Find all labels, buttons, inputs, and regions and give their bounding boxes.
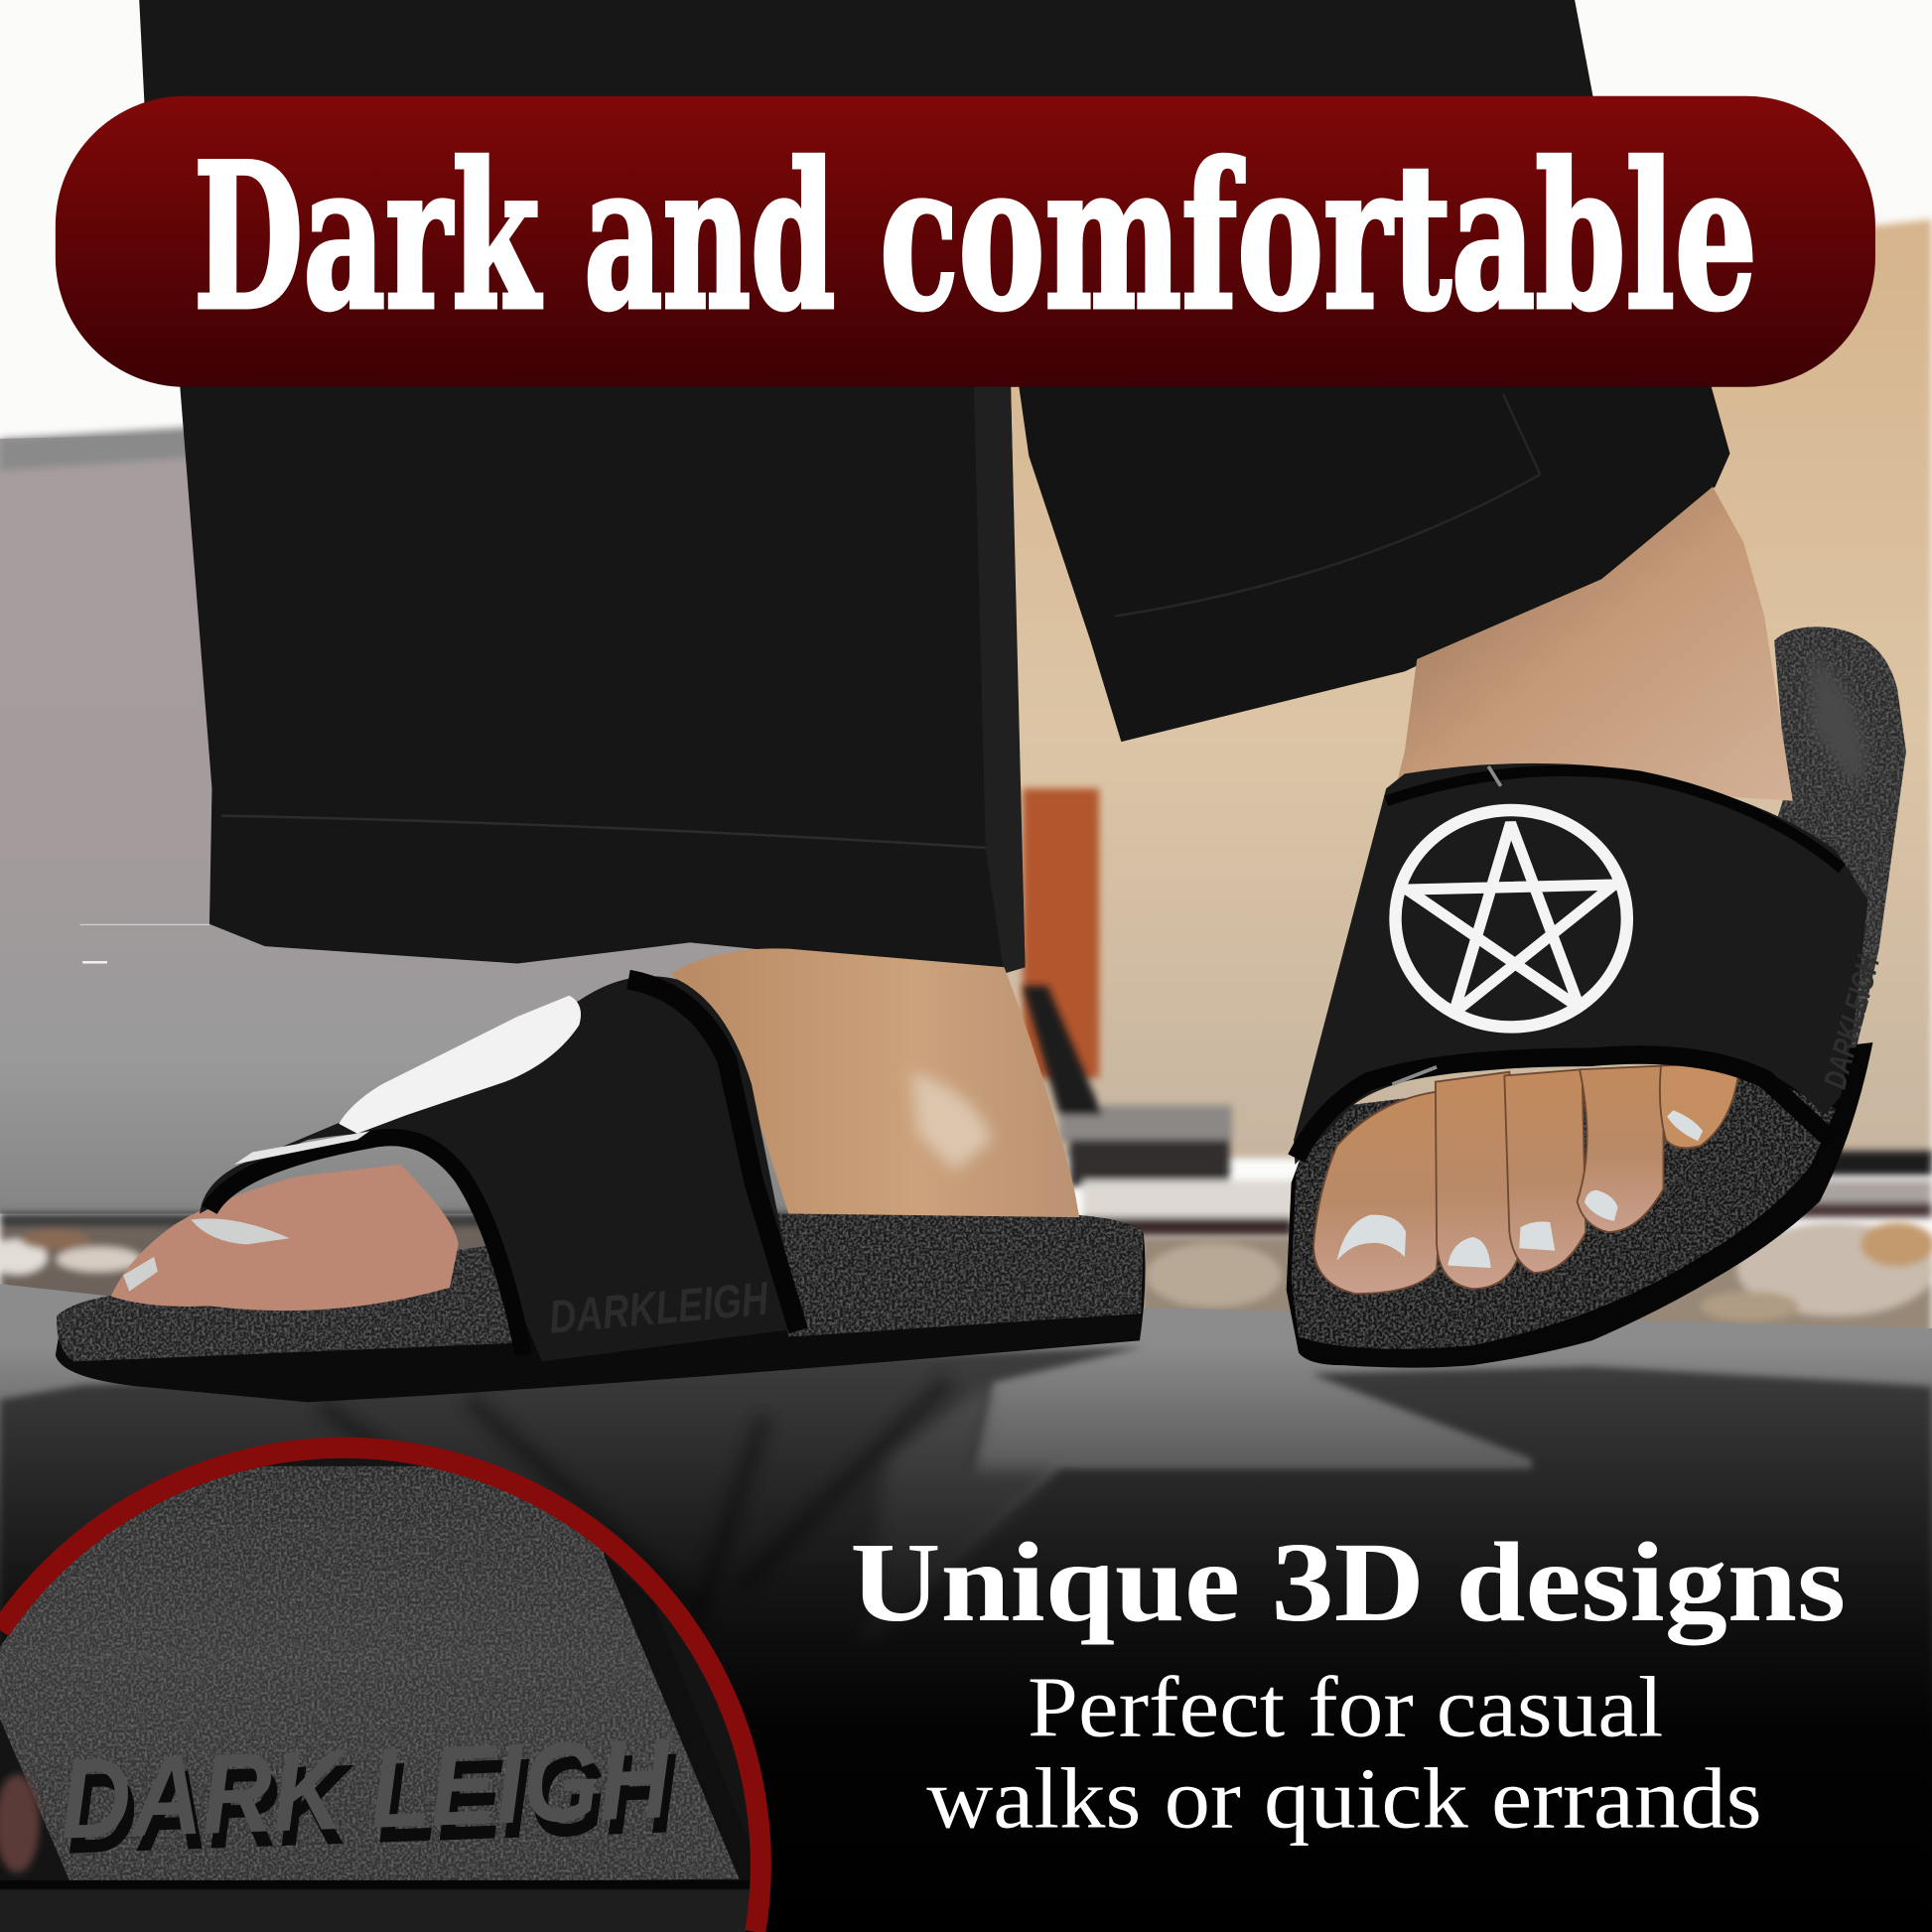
strap: [200, 976, 801, 1361]
body text: Perfect for casual: [1028, 1660, 1663, 1755]
inset detail circle: [0, 1430, 788, 1932]
left trouser leg: [179, 369, 1026, 973]
title: Dark: [194, 120, 542, 354]
right trouser leg: [1017, 369, 1729, 742]
inset logo: [64, 1739, 677, 1854]
grey wall: [0, 419, 888, 1213]
upper trousers: [139, 0, 1598, 123]
right foot and slide: [1287, 486, 1906, 1368]
concrete ground lit: [0, 1284, 1932, 1932]
toes: [1313, 1062, 1739, 1294]
title banner: [56, 96, 1875, 387]
body text: walks or quick errands: [926, 1751, 1762, 1847]
textured footbed side: [57, 1244, 517, 1361]
ground shadows: [0, 1346, 1932, 1932]
back footbed: [1725, 626, 1906, 1146]
orange post: [1023, 788, 1099, 1078]
sole edge: [56, 1232, 1146, 1402]
heading: Unique 3D designs: Unique 3D designs: [850, 1519, 1846, 1645]
body text: [926, 1660, 1762, 1847]
side logo left slide: DARKLEIGH: [547, 1272, 770, 1343]
tan wall: [986, 219, 1932, 1159]
inset lower band: [0, 1890, 788, 1932]
title: [194, 120, 1757, 354]
distant dark ledge: [1023, 986, 1932, 1237]
ankle: [1392, 486, 1793, 801]
front of foot: [111, 1165, 459, 1311]
inset right dark wedge: [604, 1555, 739, 1878]
inset logo: DARK LEIGH: [65, 1730, 680, 1878]
left foot and slide: [56, 948, 1146, 1402]
title: and: [584, 120, 835, 354]
inset strap surface: [0, 1466, 740, 1885]
inset skin hint: [0, 1774, 40, 1872]
trousers: [139, 0, 1729, 973]
textured footbed: [1292, 1059, 1836, 1349]
strap: [1294, 763, 1867, 1165]
heel and ankle: [671, 948, 1079, 1217]
glossy strap rim top: [1386, 770, 1842, 869]
pentagram icon: [1396, 810, 1627, 1027]
bottom dark fade: [0, 1343, 1932, 1932]
toenails: [1337, 1110, 1703, 1268]
pentagram sliver: [339, 996, 581, 1134]
gravel: [0, 1212, 1932, 1334]
inset logo: DARK LEIGH: [58, 1716, 674, 1863]
sole: [1287, 1042, 1872, 1368]
glossy strap rim bottom: [1297, 1055, 1831, 1159]
side logo right slide: DARKLEIGH: [1817, 951, 1886, 1092]
